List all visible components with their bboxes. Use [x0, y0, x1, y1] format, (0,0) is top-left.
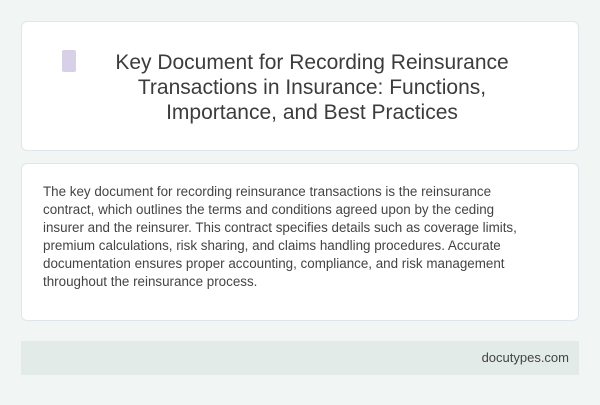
description text: documentation ensures proper accounting, compliance, and risk management	[43, 256, 504, 271]
description panel	[21, 163, 579, 321]
description text: insurer and the reinsurer. This contract specifies details such as coverage limits,	[43, 220, 517, 235]
icon: document	[62, 50, 76, 72]
footer bar	[21, 341, 579, 375]
description text: premium calculations, risk sharing, and claims handling procedures. Accurate	[43, 238, 501, 253]
title: Key Document for Recording Reinsurance Transactions in Insurance: Functions, Importance, and Best Practices	[115, 51, 509, 124]
title panel	[21, 21, 579, 151]
description text: The key document for recording reinsurance transactions is the reinsurance	[43, 184, 491, 199]
description text	[43, 184, 517, 289]
description text: throughout the reinsurance process.	[43, 274, 257, 289]
description text: contract, which outlines the terms and conditions agreed upon by the ceding	[43, 202, 494, 217]
footer text: docutypes.com	[482, 350, 569, 365]
